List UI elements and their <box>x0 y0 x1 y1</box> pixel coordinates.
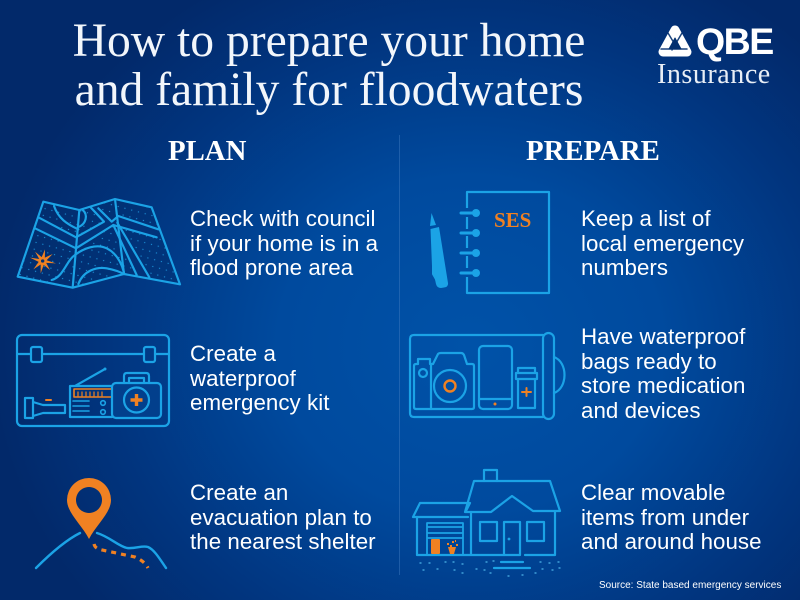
text: emergency numbers: Keep a list of <box>581 206 711 231</box>
SES label: SES <box>494 208 531 232</box>
text: check council <box>190 206 378 280</box>
text: evacuation plan: the nearest shelter <box>190 529 376 554</box>
heading: plan: PLAN <box>168 135 246 167</box>
logo: QBE Insurance <box>657 20 773 90</box>
title: and family for floodwaters <box>75 64 583 116</box>
text: waterproof bags <box>581 324 746 423</box>
text: check council: flood prone area <box>190 255 353 280</box>
text: evacuation plan: evacuation plan to <box>190 505 372 530</box>
text: clear items <box>581 480 762 554</box>
text: emergency numbers: local emergency <box>581 231 744 256</box>
title <box>73 15 585 116</box>
text: check council: if your home is in a <box>190 231 378 256</box>
title: How to prepare your home <box>73 15 585 67</box>
text: emergency kit: waterproof <box>190 366 296 391</box>
text: evacuation plan <box>190 480 376 554</box>
text: waterproof bags: Have waterproof <box>581 324 745 349</box>
icon: map <box>16 198 182 289</box>
text: emergency numbers: numbers <box>581 255 668 280</box>
logo mark <box>658 26 692 56</box>
text: waterproof bags: bags ready to <box>581 349 717 374</box>
first aid case <box>112 383 161 418</box>
text: emergency kit: Create a <box>190 341 276 366</box>
text: evacuation plan: Create an <box>190 480 288 505</box>
torch <box>25 398 65 418</box>
ground dots <box>420 561 560 576</box>
heading: prepare: PREPARE <box>526 135 660 167</box>
map roads <box>36 207 156 272</box>
radio <box>70 369 113 417</box>
text: check council: Check with council <box>190 206 376 231</box>
source note: Source: State based emergency services <box>599 580 781 591</box>
text: clear items: items from under <box>581 505 749 530</box>
text: emergency kit <box>190 341 330 415</box>
text: clear items: and around house <box>581 529 762 554</box>
text: emergency numbers <box>581 206 744 280</box>
map compass star <box>30 249 56 273</box>
text: emergency kit: emergency kit <box>190 390 329 415</box>
centre divider line <box>399 135 400 575</box>
garage items <box>431 539 440 554</box>
text: waterproof bags: store medication <box>581 373 745 398</box>
text: clear items: Clear movable <box>581 480 725 505</box>
logo wordmark: QBE <box>696 20 773 62</box>
logo subtitle: Insurance <box>657 59 771 90</box>
text: waterproof bags: and devices <box>581 398 701 423</box>
pen <box>430 213 448 288</box>
